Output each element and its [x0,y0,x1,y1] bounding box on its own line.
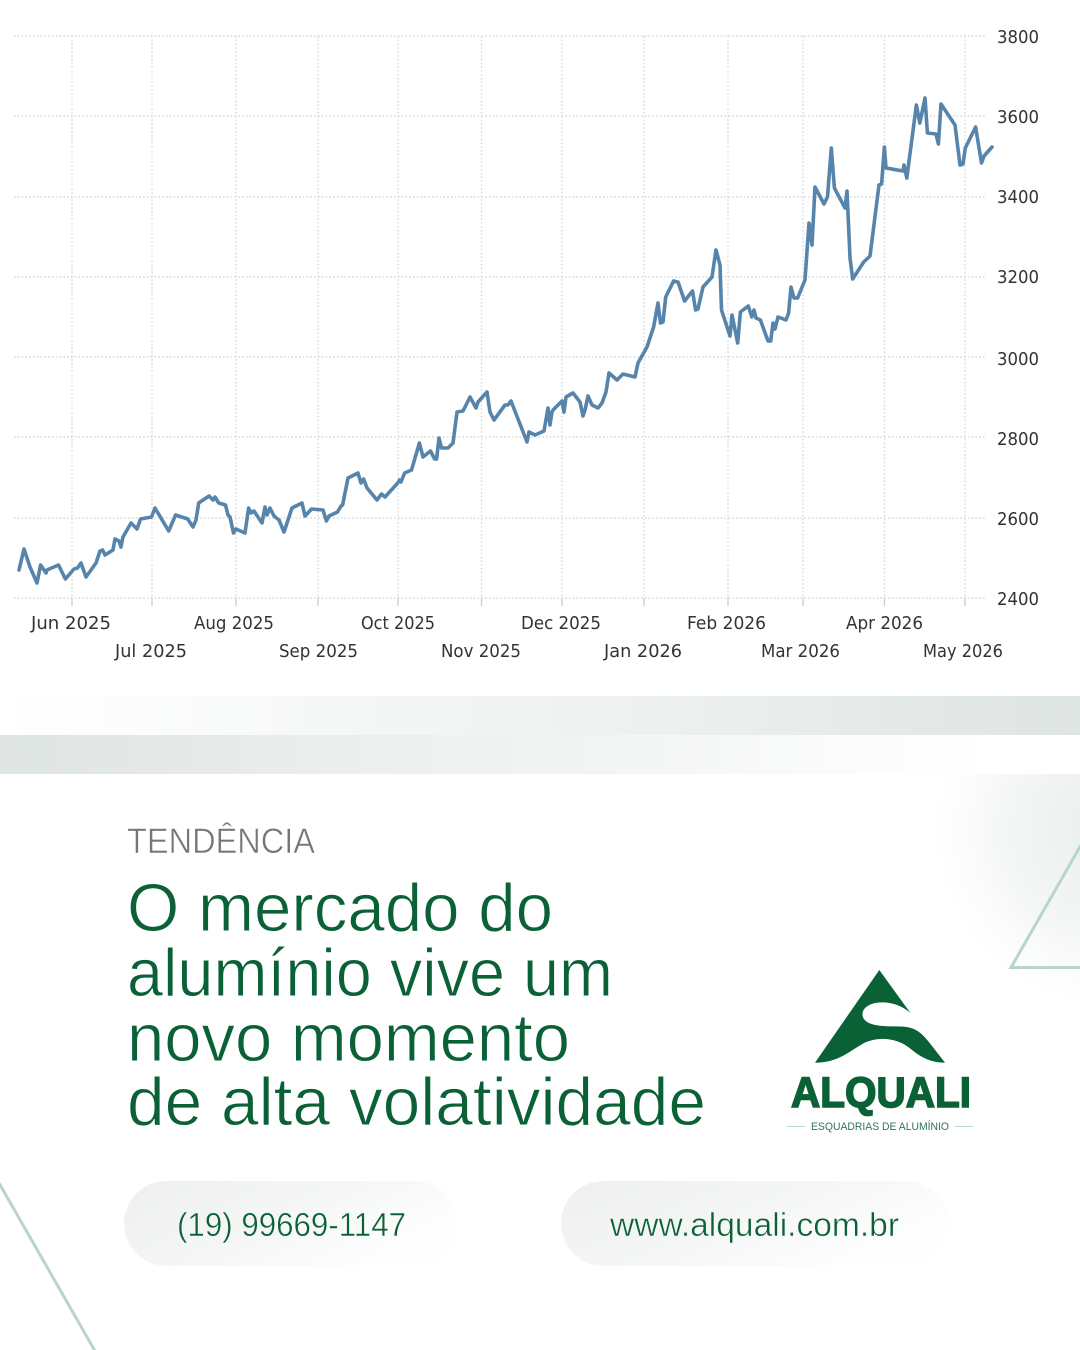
headline: O mercado do [127,870,553,946]
x axis labels: Jul 2025 [114,641,187,662]
phone pill [124,1181,458,1266]
gradient divider bands [0,696,1080,774]
y axis labels: 3800 [997,27,1039,48]
x axis labels: Jun 2025 [30,613,111,634]
x axis labels: Nov 2025 [441,641,521,662]
x axis labels: Mar 2026 [761,641,840,662]
x axis labels: Sep 2025 [279,641,358,662]
y axis labels: 3200 [997,267,1039,288]
y axis labels: 3000 [997,349,1039,370]
y axis labels: 3400 [997,187,1039,208]
x axis labels: Feb 2026 [687,613,766,634]
x axis labels: Aug 2025 [194,613,274,634]
logo tagline: ESQUADRIAS DE ALUMÍNIO [811,1120,949,1133]
x axis labels: Oct 2025 [361,613,435,634]
x axis ticks [72,598,965,606]
headline: alumínio vive um [127,935,613,1011]
x axis labels [30,613,1003,662]
diagonal line decoration [0,1183,95,1350]
x axis labels: Dec 2025 [521,613,601,634]
y axis labels: 3600 [997,107,1039,128]
y axis labels: 2800 [997,429,1039,450]
x axis labels: May 2026 [923,641,1003,662]
y axis labels [997,27,1039,610]
headline: de alta volatividade [127,1064,706,1140]
triangle outline decoration [1011,845,1080,968]
eyebrow: TENDÊNCIA: TENDÊNCIA [127,822,316,861]
x axis labels: Jan 2026 [603,641,682,662]
website pill [561,1181,948,1266]
headline: novo momento [127,1000,570,1076]
price line [19,98,992,583]
corner glow [930,774,1080,1009]
chart grid [14,36,985,598]
logo wordmark: ALQUALI [791,1069,971,1117]
y axis labels: 2600 [997,509,1039,530]
x axis labels: Apr 2026 [846,613,923,634]
logo mark [815,970,945,1063]
headline [127,870,706,1140]
website pill: www.alquali.com.br [609,1206,899,1243]
phone pill: (19) 99669-1147 [177,1206,406,1243]
logo: Alquali [787,970,973,1133]
line chart: aluminium price [14,27,1039,662]
y axis labels: 2400 [997,589,1039,610]
